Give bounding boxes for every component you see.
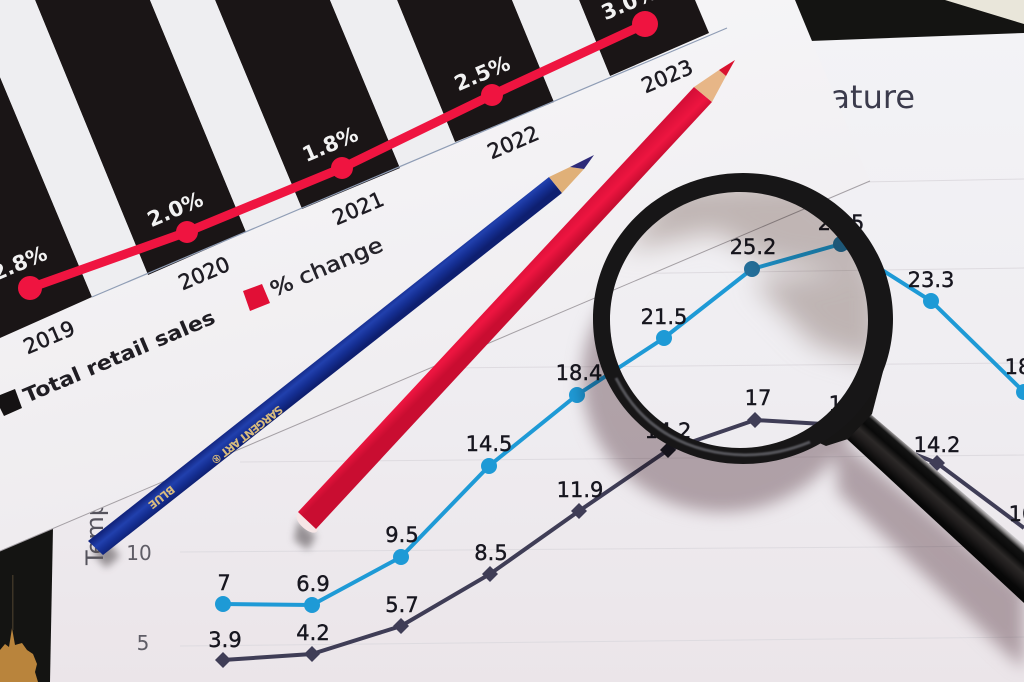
chart title: Temperature bbox=[711, 78, 915, 116]
year labels: 2023 bbox=[638, 55, 697, 98]
cream object in the top right corner bbox=[945, 0, 1024, 24]
brand text: BLUE bbox=[146, 483, 177, 511]
chart baseline bbox=[92, 28, 727, 297]
lead tip bbox=[719, 60, 735, 76]
rim highlight bbox=[616, 378, 810, 455]
dark data series: 4.2 bbox=[296, 621, 330, 645]
percent value labels: 2.0% bbox=[144, 187, 207, 232]
red pencil bbox=[293, 60, 735, 536]
brand text: SARGENT ART ® bbox=[208, 403, 285, 467]
year labels: 2022 bbox=[484, 121, 543, 164]
blue data series bbox=[215, 211, 1024, 613]
year labels: 2021 bbox=[329, 187, 388, 230]
year labels bbox=[20, 55, 697, 359]
black rim bbox=[593, 173, 893, 464]
blue data series: 6.9 bbox=[296, 572, 330, 596]
wood tip bbox=[694, 70, 726, 102]
legend: total retail sales: Total retail sales bbox=[20, 305, 219, 408]
year labels: 2019 bbox=[20, 316, 79, 359]
dark data series bbox=[208, 386, 1024, 668]
y axis values bbox=[126, 541, 152, 655]
blue pencil bbox=[88, 155, 594, 555]
blue data series: 25.2 bbox=[730, 235, 776, 259]
bar chart: total retail sales bbox=[0, 0, 709, 338]
y axis values: 5 bbox=[137, 631, 149, 655]
blue data series: 21.5 bbox=[641, 305, 687, 329]
gold ornament on the dark table bbox=[0, 575, 38, 682]
dark data series: 16 bbox=[829, 392, 855, 416]
dark data series: 5.7 bbox=[385, 593, 419, 617]
chart grid lines bbox=[180, 179, 1024, 646]
paper edge line bbox=[0, 181, 870, 551]
magnifying glass bbox=[593, 173, 1024, 603]
wood tip bbox=[549, 167, 584, 193]
dark data series: 8.5 bbox=[474, 541, 508, 565]
year labels: 2020 bbox=[175, 252, 234, 295]
pencil body bbox=[298, 87, 712, 529]
vertical axis title: Temp bbox=[81, 501, 109, 566]
blue data series: 25.5 bbox=[818, 211, 864, 235]
dark data series: 14.2 bbox=[645, 419, 691, 443]
percent value labels: 2.5% bbox=[451, 51, 514, 96]
blue data series: 14.5 bbox=[466, 432, 512, 456]
lead tip bbox=[570, 155, 594, 169]
blue data series: 18.4 bbox=[556, 361, 602, 385]
handle bbox=[835, 405, 1024, 603]
upper paper: retail sales chart sheet bbox=[0, 0, 870, 551]
y axis values: 10 bbox=[126, 541, 152, 565]
shadow: pencils bbox=[92, 520, 316, 568]
dark data series: 3.9 bbox=[208, 628, 242, 652]
percent value labels: 1.8% bbox=[299, 122, 362, 167]
blue data series: 9.5 bbox=[385, 523, 419, 547]
blue data series: 23.3 bbox=[908, 268, 954, 292]
handle collar bbox=[815, 360, 886, 446]
brand text bbox=[146, 403, 285, 511]
white gaps between bars bbox=[0, 0, 610, 297]
dark data series: 14.2 bbox=[914, 433, 960, 457]
legend: percent change bbox=[243, 233, 386, 311]
dark data series: 11.9 bbox=[557, 478, 603, 502]
dark data series: 17 bbox=[745, 386, 771, 410]
red percent change line bbox=[18, 11, 658, 300]
shadow: magnifying glass bbox=[582, 244, 1024, 668]
percent value labels bbox=[0, 0, 661, 286]
legend: percent change: % change bbox=[267, 233, 386, 302]
pencil end cap bbox=[293, 510, 321, 536]
blue data series: 7 bbox=[217, 571, 231, 595]
pencil body bbox=[88, 177, 562, 555]
lens shading bbox=[625, 180, 880, 365]
